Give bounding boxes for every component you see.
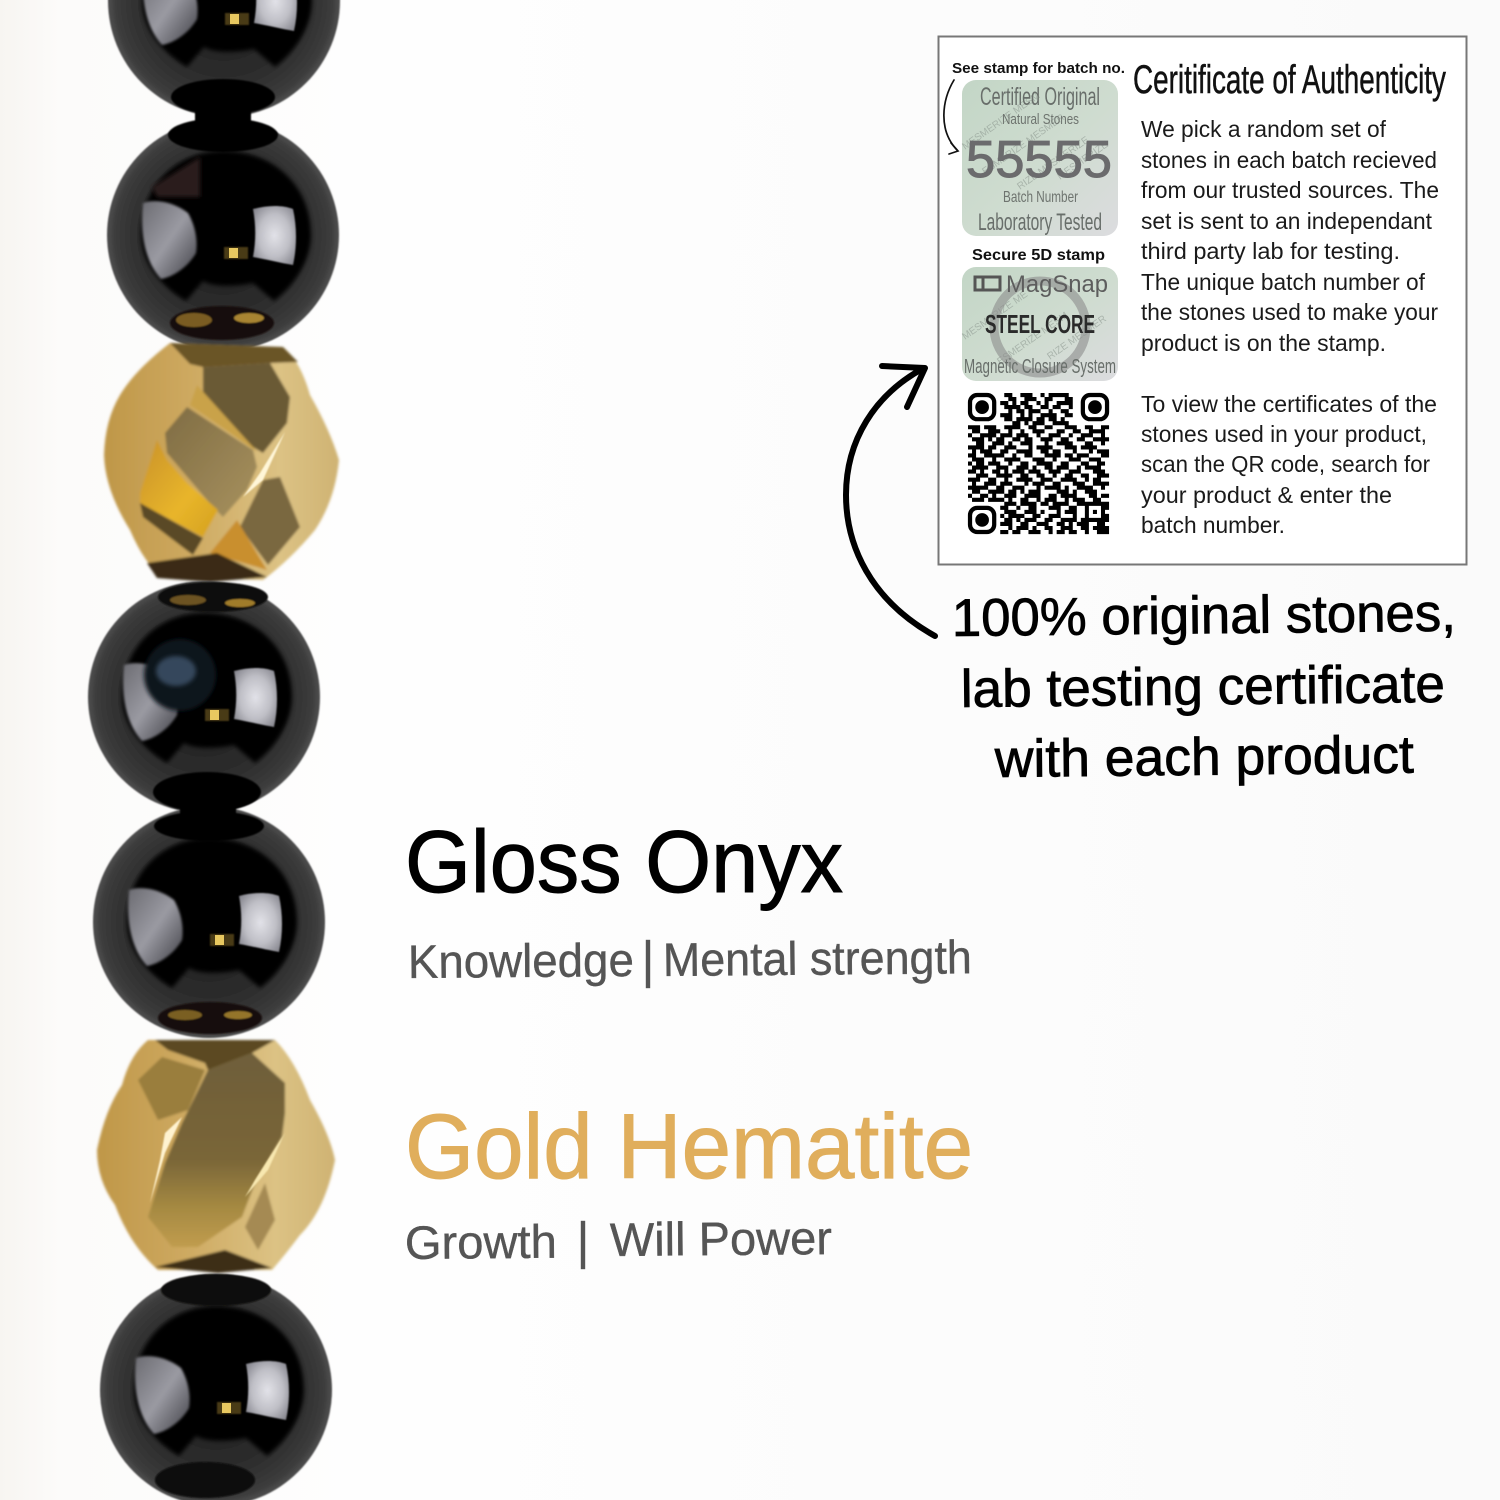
batch stamp: MESMERIZE bbox=[1055, 139, 1111, 182]
certificate description: third party lab for testing. bbox=[1141, 238, 1400, 264]
stamp caption: See stamp for batch no. bbox=[952, 60, 1125, 77]
onyx bead 1 bbox=[108, 0, 340, 117]
certificate panel bbox=[938, 36, 1466, 564]
batch stamp: Laboratory Tested bbox=[978, 209, 1102, 236]
certificate instructions: your product & enter the bbox=[1141, 482, 1392, 508]
batch stamp: Natural Stones bbox=[1002, 111, 1079, 128]
batch stamp: 55555 bbox=[966, 131, 1112, 189]
certificate instructions bbox=[1141, 391, 1437, 538]
batch stamp: Batch Number bbox=[1003, 189, 1078, 206]
properties: Gloss Onyx: Knowledge bbox=[408, 933, 634, 988]
secure stamp caption: Secure 5D stamp bbox=[972, 247, 1105, 264]
certificate description: the stones used to make your bbox=[1141, 299, 1438, 325]
onyx bead 5 bbox=[100, 1274, 332, 1500]
certificate description: product is on the stamp. bbox=[1141, 330, 1386, 356]
certificate description: from our trusted sources. The bbox=[1141, 177, 1439, 203]
certificate description: We pick a random set of bbox=[1141, 116, 1387, 142]
gold bead 2 bbox=[97, 1040, 335, 1273]
onyx bead 2 bbox=[107, 119, 339, 351]
properties: Gloss Onyx: Mental strength bbox=[663, 930, 972, 986]
properties: Gloss Onyx bbox=[408, 930, 972, 988]
magsnap stamp: Magnetic Closure System bbox=[964, 356, 1116, 378]
callout text: with each product bbox=[993, 726, 1414, 789]
batch stamp: MESMERIZE MESM bbox=[960, 91, 1042, 152]
callout text bbox=[952, 584, 1456, 789]
magsnap stamp: MESMERIZE ME bbox=[960, 289, 1030, 342]
heading: Gloss Onyx: Gloss Onyx bbox=[405, 812, 843, 911]
magsnap stamp: RIZE MESMER bbox=[1045, 314, 1109, 362]
heading: Gold Hematite: Gold Hematite bbox=[405, 1096, 973, 1198]
certificate instructions: scan the QR code, search for bbox=[1141, 451, 1430, 477]
icon: small curved arrow bbox=[944, 80, 958, 154]
bead strand bbox=[88, 0, 340, 1500]
certificate description: set is sent to an independant bbox=[1141, 208, 1433, 234]
certificate instructions: batch number. bbox=[1141, 512, 1285, 538]
gold bead 1 bbox=[104, 343, 339, 582]
batch stamp: ESMERIZE MESMER bbox=[980, 112, 1067, 177]
magsnap stamp: STEEL CORE bbox=[985, 309, 1095, 339]
batch stamp: RIZE MESMERIZE bbox=[1015, 135, 1092, 192]
certificate description: stones in each batch recieved bbox=[1141, 147, 1437, 173]
onyx bead 3 with blue inclusion bbox=[88, 581, 320, 813]
magsnap stamp: ESMERIZE MESM bbox=[995, 310, 1070, 367]
callout text: lab testing certificate bbox=[961, 655, 1445, 719]
certificate description: The unique batch number of bbox=[1141, 269, 1426, 295]
properties: Gold Hematite bbox=[405, 1211, 832, 1269]
onyx bead 4 bbox=[93, 806, 325, 1038]
certificate description bbox=[1141, 116, 1439, 356]
certificate instructions: stones used in your product, bbox=[1141, 421, 1427, 447]
magsnap stamp: MagSnap bbox=[1006, 271, 1108, 298]
batch stamp: Certified Original bbox=[980, 83, 1100, 111]
properties: Gold Hematite: Growth bbox=[405, 1215, 557, 1269]
spacers between beads bbox=[153, 79, 278, 1498]
arrow to certificate bbox=[846, 366, 935, 636]
certificate instructions: To view the certificates of the bbox=[1141, 391, 1437, 417]
callout text: 100% original stones, bbox=[952, 584, 1456, 648]
properties: Gold Hematite: Will Power bbox=[610, 1211, 832, 1266]
batch stamp bbox=[960, 80, 1118, 236]
magsnap stamp bbox=[960, 267, 1118, 381]
QR code bbox=[968, 395, 1109, 532]
